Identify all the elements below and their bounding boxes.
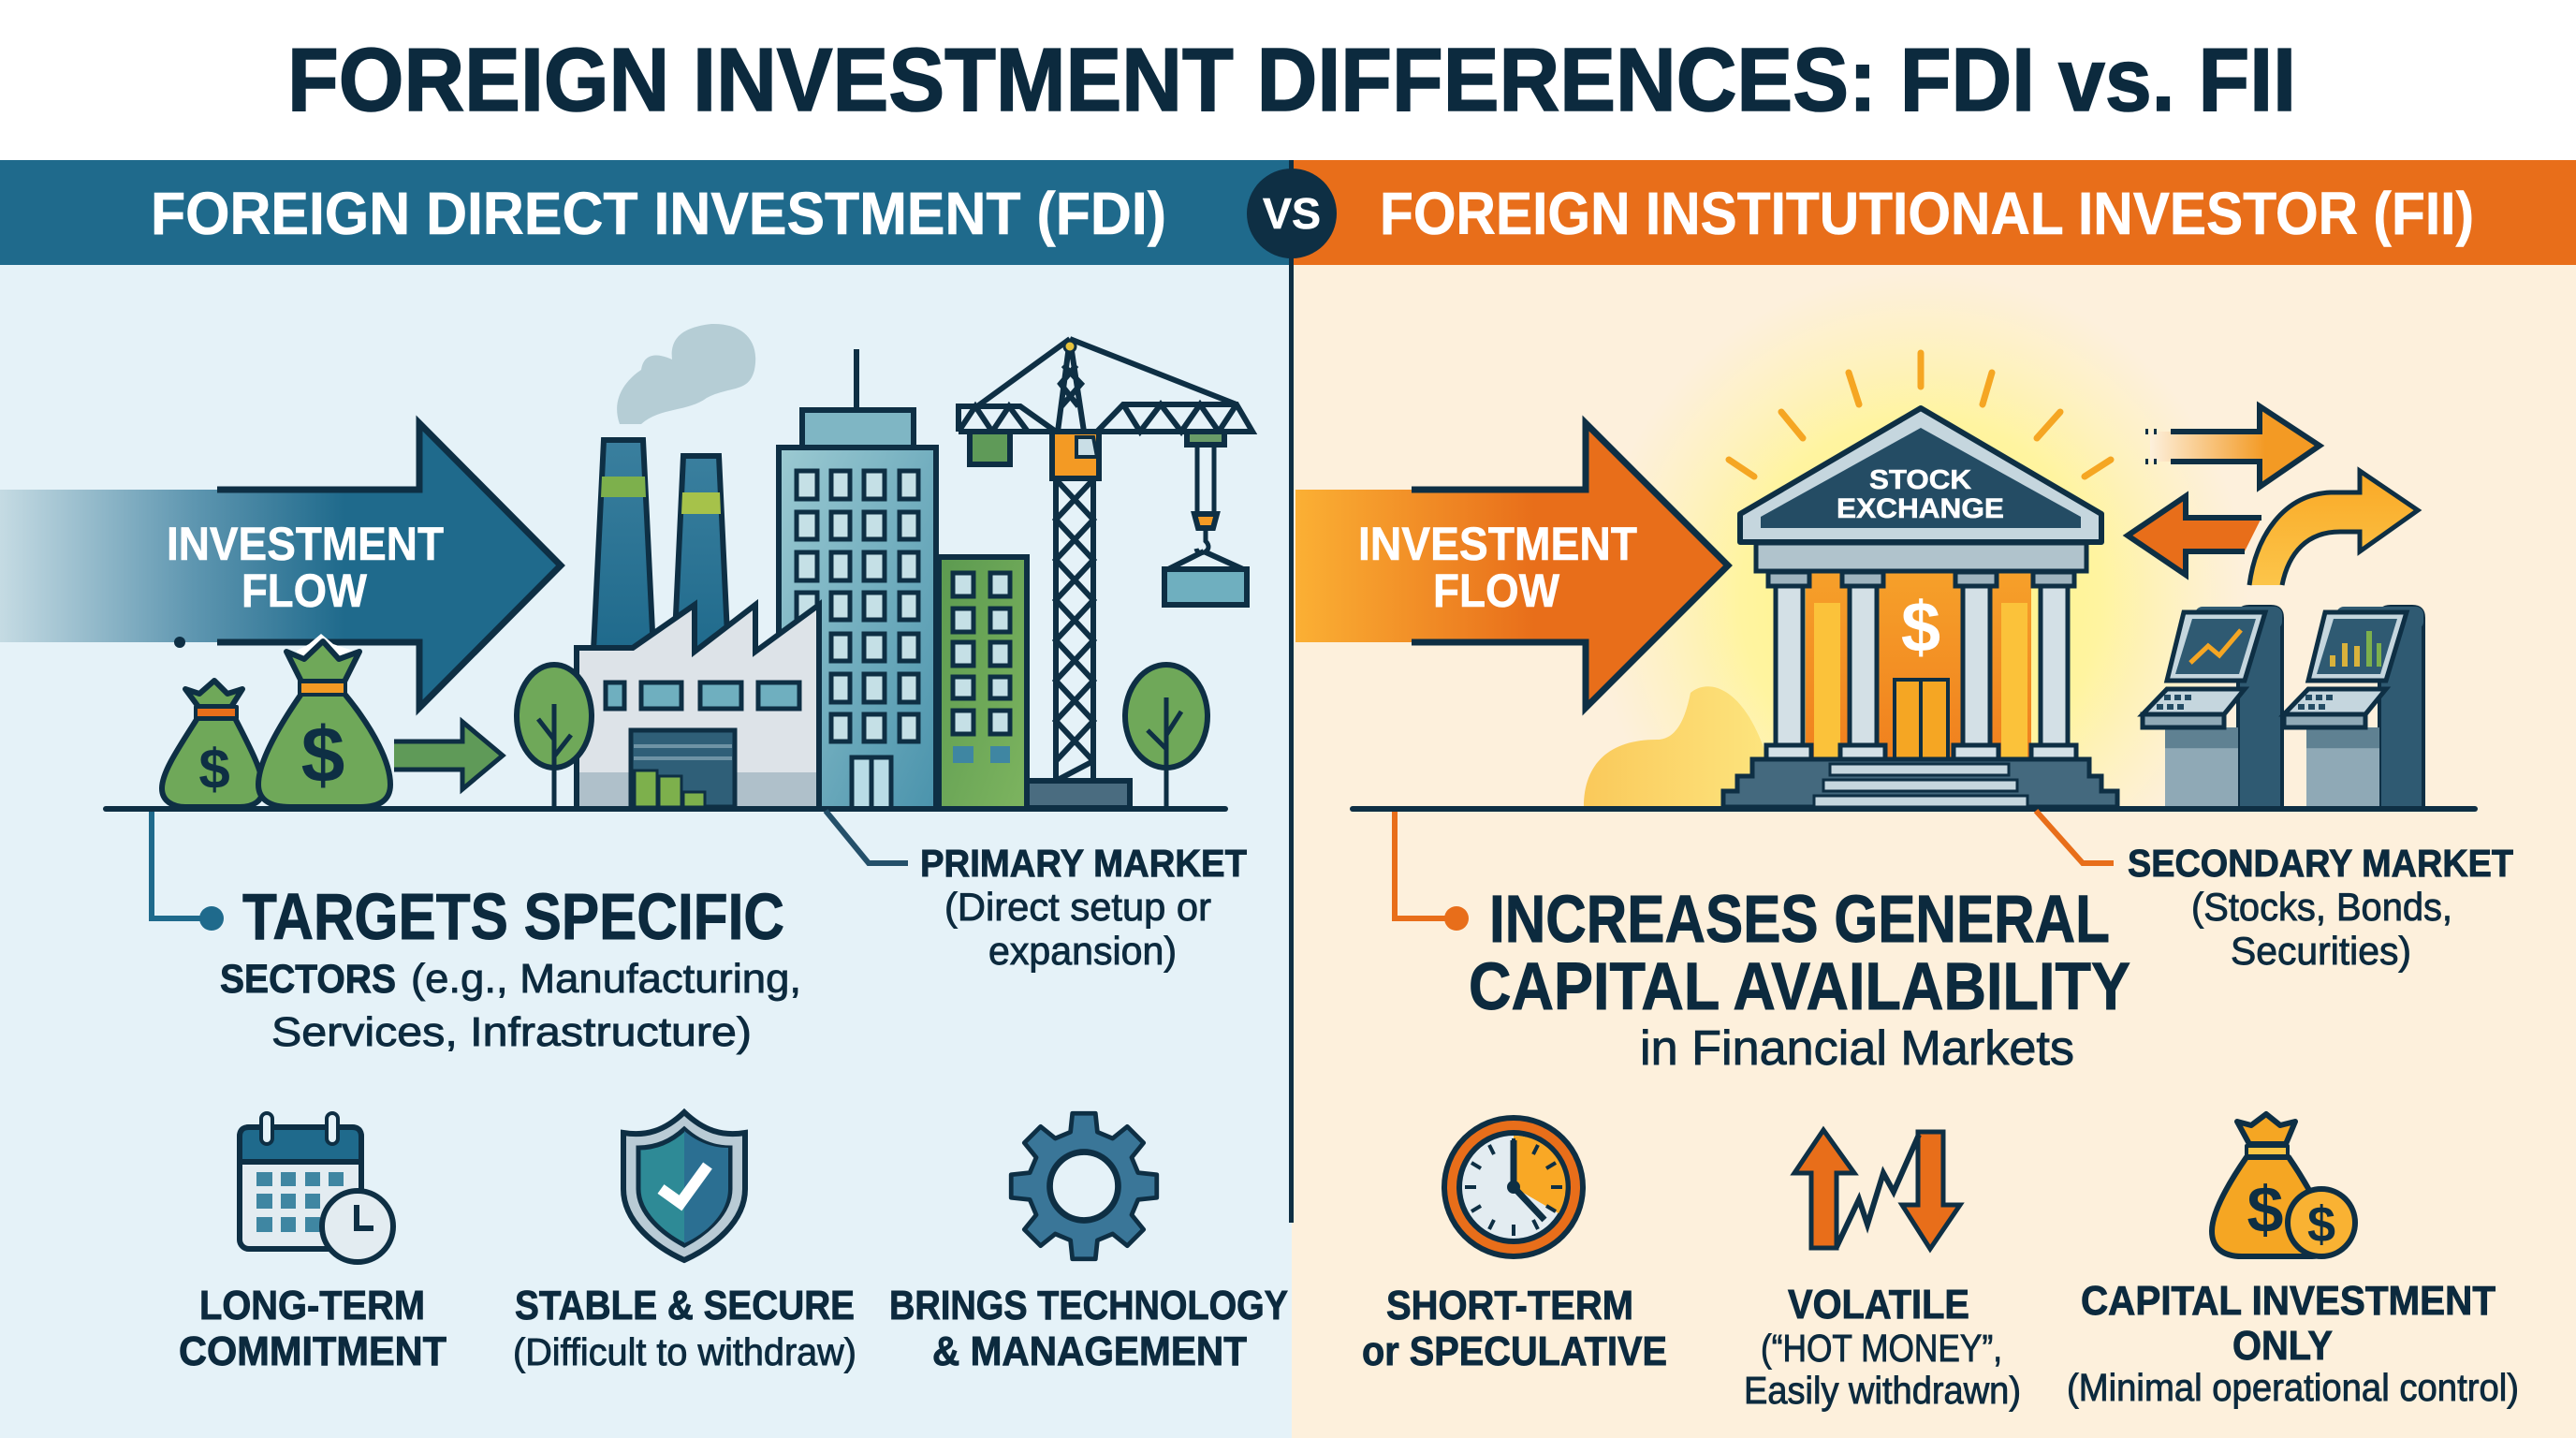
smokestack left: [593, 440, 653, 651]
rays: [1729, 353, 2111, 477]
icon: money bag and coin: [2212, 1114, 2355, 1256]
text: primary market: PRIMARY MARKET: [920, 842, 1247, 885]
label: stable and secure: (Difficult to withdraw): [513, 1330, 856, 1373]
icon: clock: [1444, 1118, 1583, 1256]
label: volatile: [1744, 1282, 2021, 1412]
label: stock exchange: STOCK: [1869, 465, 1971, 495]
factory: [577, 605, 819, 809]
back wall: [1806, 572, 2031, 759]
text: secondary market: (Stocks, Bonds,: [2191, 885, 2452, 929]
centre divider: [1289, 160, 1294, 1223]
label: stable and secure: [513, 1283, 856, 1373]
label: capital investment only: CAPITAL INVESTMENT: [2081, 1278, 2496, 1324]
arrow: investment flow FDI: [0, 423, 561, 708]
label: long-term commitment: [179, 1283, 446, 1374]
panel: FII background: [1292, 265, 2576, 1438]
text: targets specific: TARGETS SPECIFIC: [242, 880, 784, 953]
entablature: [1756, 543, 2086, 571]
ground line FDI: [103, 806, 1228, 812]
tower building: [779, 349, 936, 809]
text: increases general capital availability: INCREASES GENERAL: [1489, 883, 2110, 957]
money bag small: $: [198, 738, 230, 800]
label: volatile: (“HOT MONEY”,: [1761, 1327, 2002, 1370]
steps: [1723, 759, 2117, 807]
roof: [1740, 408, 2101, 542]
header band: FII: [1292, 160, 2576, 265]
connector: secondary market: [2036, 811, 2114, 863]
heading: FDI: FOREIGN DIRECT INVESTMENT (FDI): [151, 180, 1166, 247]
VS badge: [1247, 169, 1337, 258]
green building: [939, 557, 1027, 809]
arrow: incoming left: [2128, 496, 2261, 575]
arrow: investment flow FII: FLOW: [1433, 565, 1560, 617]
dollar sign: $: [1901, 588, 1940, 668]
icon: volatile arrows: [1794, 1130, 1960, 1249]
label: stock exchange: EXCHANGE: [1837, 493, 2004, 524]
label: short-term or speculative: [1362, 1283, 1667, 1374]
VS badge: VS: [1263, 189, 1321, 238]
arrow: investment flow FII: INVESTMENT: [1358, 518, 1637, 570]
money bag large: $: [301, 711, 344, 799]
icon: money bag and coin: $: [2307, 1196, 2335, 1253]
glow behind exchange: [1584, 297, 2222, 806]
tree left: [517, 665, 592, 809]
arrow: investment flow FII: [1295, 423, 1728, 708]
label: brings technology and management: [889, 1283, 1288, 1374]
smoke: [617, 324, 755, 424]
text: primary market: expansion): [988, 929, 1177, 973]
label: volatile: VOLATILE: [1788, 1282, 1969, 1328]
title: FOREIGN INVESTMENT DIFFERENCES: FDI vs. FII: [287, 30, 2296, 130]
text: increases general capital availability: in Financial Markets: [1640, 1021, 2074, 1076]
tree right: [1125, 665, 1208, 809]
connector: primary market: [826, 811, 908, 863]
label: short-term or speculative: SHORT-TERM: [1386, 1283, 1633, 1328]
arrow: curved up right: [2249, 471, 2418, 585]
label: brings technology and management: & MANAGEMENT: [932, 1328, 1247, 1374]
label: volatile: Easily withdrawn): [1744, 1369, 2021, 1412]
label: capital investment only: (Minimal operational control): [2067, 1366, 2519, 1409]
arrow: green to factory: [394, 722, 503, 789]
text: targets specific: Services, Infrastructure): [271, 1009, 752, 1055]
text: targets specific: [220, 880, 801, 1055]
text: primary market: [920, 842, 1247, 973]
kiosk left: [2143, 607, 2282, 809]
label: capital investment only: ONLY: [2232, 1323, 2333, 1369]
icon: money bag and coin: $: [2247, 1173, 2283, 1246]
connector: increases: [1395, 812, 1469, 931]
text: targets specific: SECTORS: [220, 957, 396, 1002]
money bag small: [162, 681, 263, 807]
money bag large: [258, 634, 390, 807]
icon: gear: [1011, 1113, 1157, 1259]
arrow: investment flow FDI: FLOW: [242, 565, 368, 617]
connector: targets: [152, 812, 224, 931]
arrow: outgoing right: [2145, 406, 2320, 487]
columns: [1766, 572, 2076, 759]
FDI illustration: [0, 324, 1252, 812]
arrow: investment flow FDI: INVESTMENT: [167, 518, 444, 570]
label: long-term commitment: LONG-TERM: [199, 1283, 425, 1328]
label: brings technology and management: BRINGS TECHNOLOGY: [889, 1283, 1288, 1328]
panel: FDI background: [0, 265, 1292, 1438]
smokestack right: [674, 456, 728, 655]
text: targets specific: (e.g., Manufacturing,: [411, 956, 801, 1002]
crane: [959, 339, 1252, 808]
text: secondary market: [2128, 842, 2513, 973]
kiosk right: [2284, 607, 2423, 809]
label: capital investment only: [2067, 1278, 2519, 1409]
text: secondary market: SECONDARY MARKET: [2128, 842, 2513, 885]
text: primary market: (Direct setup or: [944, 885, 1211, 929]
header band: FDI: [0, 160, 1292, 265]
icon: shield: [623, 1112, 745, 1260]
label: short-term or speculative: or SPECULATIVE: [1362, 1328, 1667, 1374]
label: long-term commitment: COMMITMENT: [179, 1328, 446, 1374]
icon: calendar with clock: [240, 1113, 393, 1262]
label: stock exchange: [1837, 465, 2004, 524]
door: [1895, 680, 1948, 759]
text: increases general capital availability: [1469, 883, 2130, 1076]
stock exchange building: [1723, 408, 2117, 807]
FII illustration: [1295, 297, 2478, 812]
ground line FII: [1350, 806, 2478, 812]
heading: FII: FOREIGN INSTITUTIONAL INVESTOR (FII): [1380, 180, 2474, 247]
text: secondary market: Securities): [2231, 929, 2411, 973]
label: stable and secure: STABLE & SECURE: [515, 1283, 855, 1328]
text: increases general capital availability: CAPITAL AVAILABILITY: [1469, 950, 2130, 1024]
